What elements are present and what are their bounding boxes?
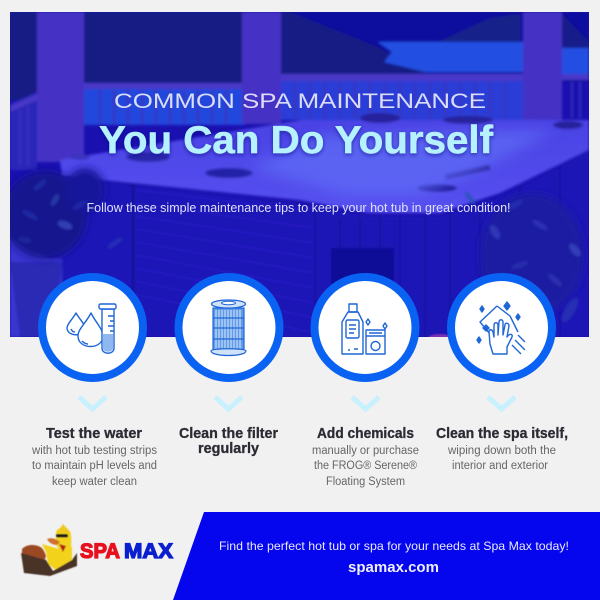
step text: Floating System	[326, 476, 405, 488]
subtitle: Follow these simple maintenance tips to keep your hot tub in great condition!	[86, 201, 510, 215]
step text: wiping down both the	[447, 445, 556, 457]
step heading	[179, 426, 278, 457]
step heading: Add chemicals	[317, 426, 414, 442]
title line: common spa maintenance: COMMON SPA MAINTENANCE	[114, 90, 486, 113]
chevron	[215, 397, 242, 409]
icon: chemical bottle and box	[314, 277, 416, 378]
step heading: Test the water	[46, 426, 142, 442]
step 2: clean the filter	[178, 277, 280, 457]
step text	[31, 445, 157, 488]
step heading: Clean the filter	[179, 426, 278, 442]
chevron	[352, 397, 379, 409]
step 4: clean the spa itself	[436, 277, 568, 472]
step text	[447, 445, 556, 472]
step 1: test the water	[31, 277, 157, 488]
step text: interior and exterior	[452, 460, 548, 472]
chevron	[79, 397, 106, 409]
logo: Spa Max	[21, 524, 173, 576]
step text: manually or purchase	[312, 445, 419, 457]
step 3: add chemicals	[312, 277, 419, 488]
footer website: spamax.com	[348, 559, 439, 576]
step heading: Clean the spa itself,	[436, 426, 568, 442]
footer banner	[173, 512, 600, 600]
icon: duck in hot tub	[21, 524, 77, 576]
step text	[312, 445, 419, 488]
logo wordmark: MAX: MAX	[124, 540, 173, 563]
step text: to maintain pH levels and	[32, 460, 157, 472]
icon: filter cartridge	[178, 277, 280, 378]
hero photo: blue-tinted hot tub on a deck	[3, 12, 589, 342]
step text: the FROG® Serene®	[314, 460, 417, 472]
step text: with hot tub testing strips	[31, 445, 157, 457]
icon: hand wiping with cloth	[451, 277, 552, 378]
icon: water drops and test tube	[42, 277, 143, 378]
step heading: regularly	[198, 441, 259, 457]
footer call to action: Find the perfect hot tub or spa for your needs at Spa Max today!	[219, 539, 569, 553]
title line: you can do yourself: You Can Do Yourself	[99, 119, 494, 162]
logo wordmark: SPA: SPA	[80, 540, 120, 563]
chevron	[488, 397, 515, 409]
step text: keep water clean	[52, 476, 137, 488]
